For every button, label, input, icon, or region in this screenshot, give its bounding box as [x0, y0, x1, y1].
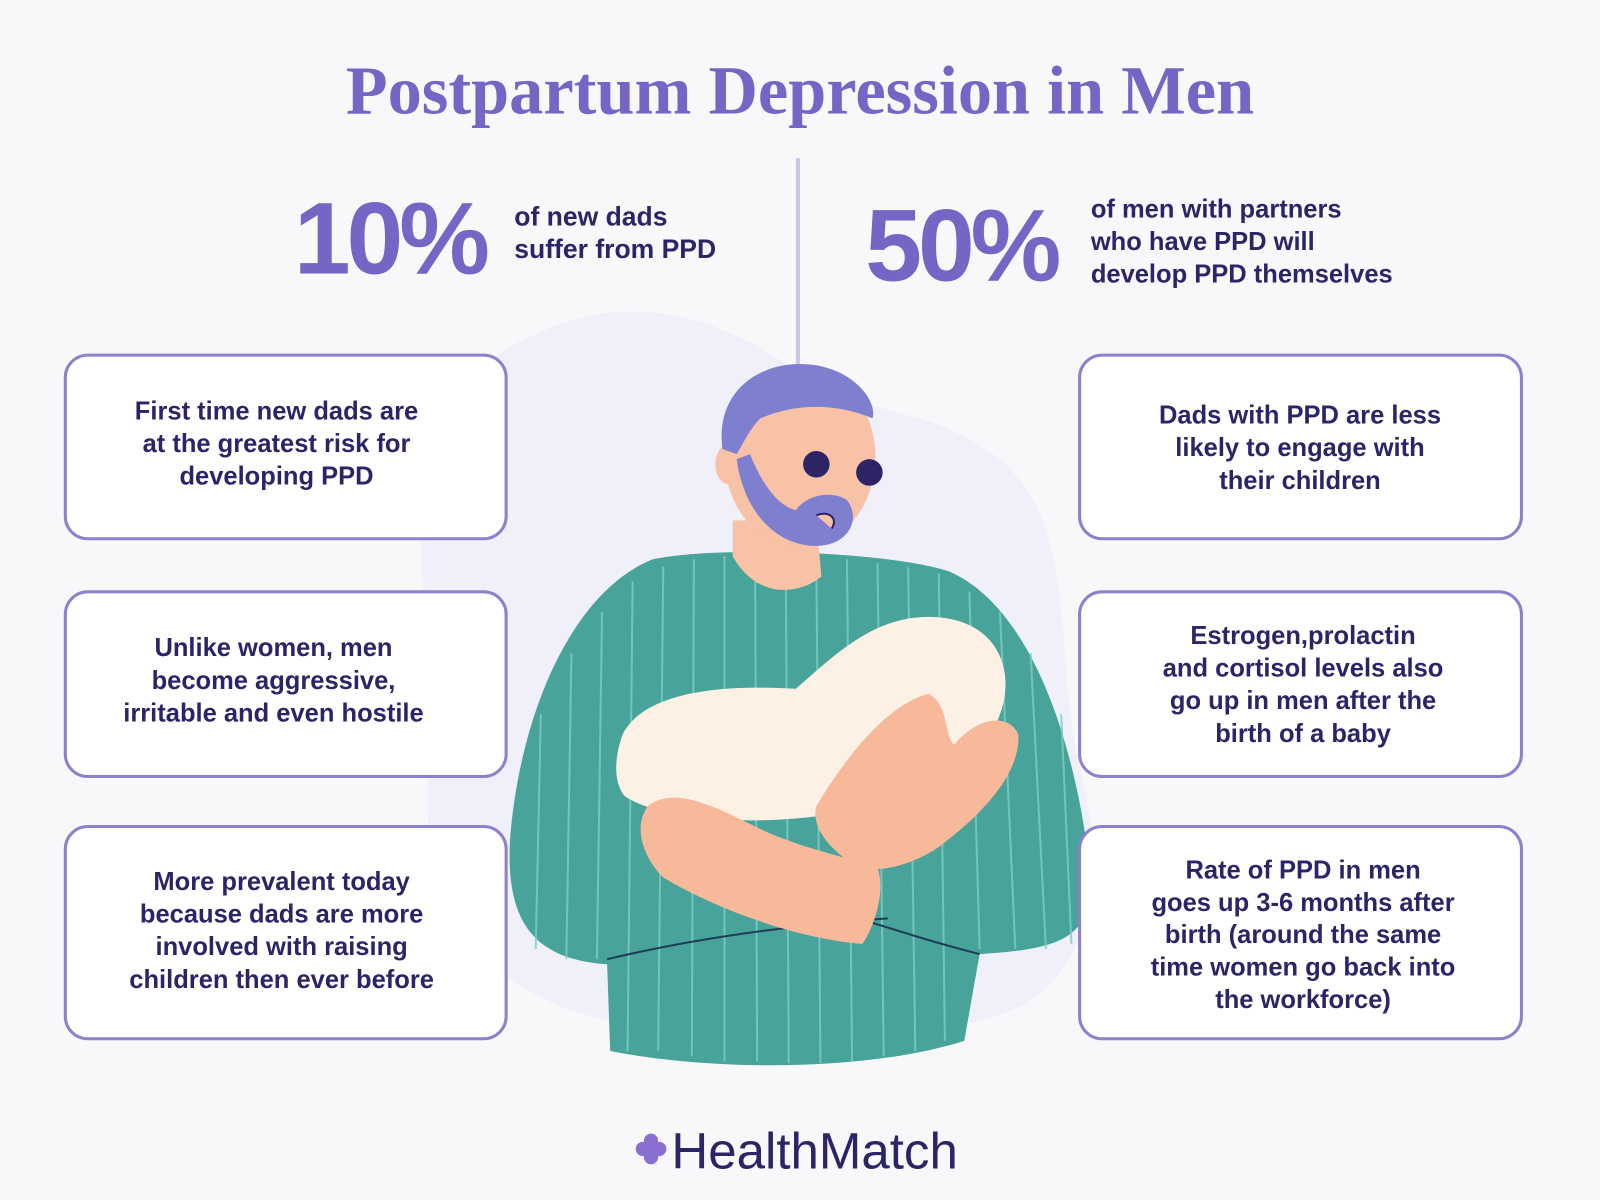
title: Postpartum Depression in Men: [346, 52, 1254, 128]
right box 1: likely to engage with: [1175, 434, 1425, 462]
right box 1: [1080, 355, 1521, 539]
left box 2: Unlike women, men: [154, 634, 393, 662]
right box 2: [1080, 592, 1521, 777]
left box 3: because dads are more: [140, 900, 423, 928]
right box 3: birth (around the same: [1165, 921, 1441, 949]
left box 2: [65, 592, 506, 777]
stat: 50%: who have PPD will: [1090, 228, 1315, 256]
right box 2: birth of a baby: [1215, 720, 1392, 748]
logo: HealthMatch: HealthMatch: [671, 1122, 958, 1179]
right box 3: the workforce): [1215, 986, 1391, 1014]
right box 3: goes up 3-6 months after: [1151, 889, 1455, 917]
hair: [722, 364, 873, 454]
right box 1: their children: [1219, 467, 1381, 495]
stat: 10%: 10%: [294, 181, 488, 295]
left box 2: become aggressive,: [152, 667, 395, 695]
stat: 50%: [865, 189, 1393, 303]
left box 3: [65, 827, 506, 1039]
left box 3: children then ever before: [129, 966, 434, 994]
right box 3: [1080, 827, 1521, 1039]
sweater: [510, 552, 1091, 1065]
left box 1: developing PPD: [179, 463, 374, 491]
right box 3: time women go back into: [1151, 954, 1455, 982]
left box 1: at the greatest risk for: [143, 430, 411, 458]
stat: 10%: suffer from PPD: [514, 234, 716, 264]
eyes: [803, 451, 830, 478]
left box 1: [65, 355, 506, 539]
beard: [737, 454, 853, 546]
center divider line: [796, 158, 800, 365]
stat: 50%: develop PPD themselves: [1091, 261, 1393, 289]
illustration: man holding baby: [510, 364, 1091, 1065]
right box 2: go up in men after the: [1170, 687, 1436, 715]
right box 3: Rate of PPD in men: [1185, 857, 1421, 885]
stat: 50%: 50%: [865, 189, 1060, 303]
right box 1: Dads with PPD are less: [1159, 401, 1441, 429]
head: [724, 367, 876, 547]
stat: 10%: of new dads: [514, 202, 668, 232]
background blob: [421, 312, 1093, 1039]
stat: 10%: [294, 181, 716, 295]
right box 2: and cortisol levels also: [1163, 655, 1443, 683]
right box 2: Estrogen,prolactin: [1190, 622, 1416, 650]
stat: 50%: of men with partners: [1091, 195, 1342, 223]
neck: [733, 520, 821, 590]
left box 1: First time new dads are: [135, 397, 418, 425]
left box 2: irritable and even hostile: [123, 699, 424, 727]
left box 3: More prevalent today: [153, 868, 411, 896]
hands: [641, 798, 880, 944]
baby blanket: [616, 617, 1006, 820]
left box 3: involved with raising: [156, 933, 408, 961]
